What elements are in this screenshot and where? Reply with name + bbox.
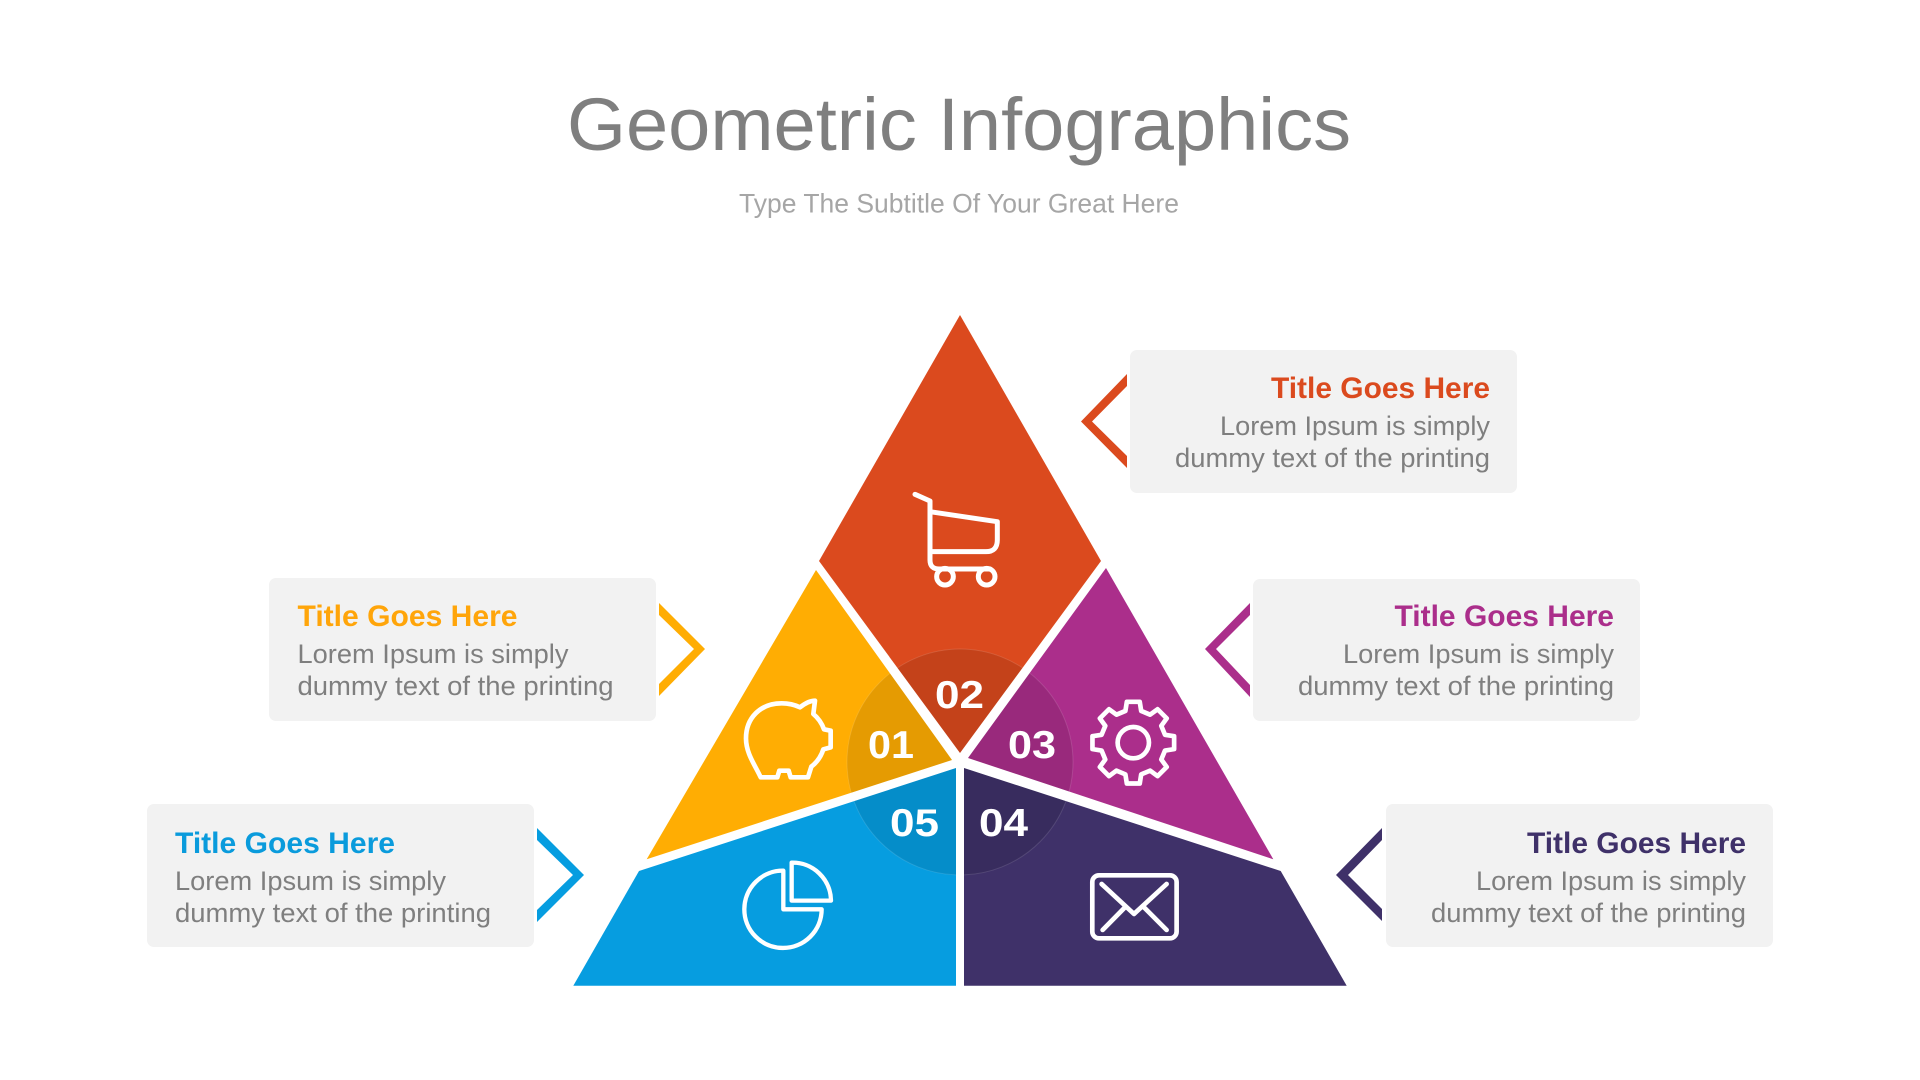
callout body 04 (1431, 866, 1746, 928)
chevron 01 (659, 603, 705, 696)
callout: 04 dark purple (1336, 804, 1773, 947)
icon: shopping cart (915, 494, 997, 585)
callout body 05 (175, 866, 491, 928)
icon: pie chart (744, 863, 831, 948)
callout panel 04 (1386, 804, 1773, 947)
callout body 04: Lorem Ipsum is simply (1476, 866, 1746, 896)
chevron 02 (1081, 374, 1127, 468)
callout: 01 yellow (269, 578, 705, 721)
callout body 01 (298, 639, 614, 701)
callout body 04: dummy text of the printing (1431, 898, 1746, 928)
callout body 02 (1175, 411, 1490, 473)
callout body 02: Lorem Ipsum is simply (1220, 411, 1490, 441)
callout body 05: Lorem Ipsum is simply (175, 866, 446, 896)
callout body 01: dummy text of the printing (298, 671, 614, 701)
segment 02: orange (819, 315, 1101, 753)
chevron 05 (537, 828, 584, 922)
segment 01: yellow (646, 570, 952, 860)
callout: 02 orange (1081, 350, 1517, 493)
number 02: 02 (935, 674, 984, 717)
segment 04: dark purple (964, 768, 1347, 986)
number 05: 05 (890, 802, 939, 845)
segment 05: blue (573, 768, 956, 986)
infographic canvas (147, 96, 1773, 986)
icon: gear (1092, 702, 1174, 783)
callout body 05: dummy text of the printing (175, 898, 491, 928)
number 04: 04 (979, 802, 1028, 845)
callout panel 03 (1253, 579, 1640, 721)
callout: 03 magenta (1205, 579, 1640, 721)
callout heading 02: Title Goes Here (1271, 372, 1490, 405)
callout body 03: dummy text of the printing (1298, 671, 1614, 701)
callout body 01: Lorem Ipsum is simply (298, 639, 569, 669)
title: Geometric Infographics (567, 83, 1351, 166)
callout panel 05 (147, 804, 534, 947)
number 01: 01 (868, 724, 914, 767)
icon: envelope (1092, 875, 1177, 938)
callout panel 01 (269, 578, 656, 721)
callout heading 05: Title Goes Here (175, 827, 395, 860)
subtitle: Type The Subtitle Of Your Great Here (739, 188, 1179, 218)
callout body 03: Lorem Ipsum is simply (1343, 639, 1614, 669)
callout panel 02 (1130, 350, 1517, 493)
icon: piggy bank (746, 701, 831, 777)
callout heading 04: Title Goes Here (1527, 827, 1746, 860)
chevron 03 (1205, 603, 1250, 697)
callout heading 01: Title Goes Here (298, 600, 518, 633)
callout body 02: dummy text of the printing (1175, 443, 1490, 473)
callout: 05 blue (147, 804, 584, 947)
callout heading 03: Title Goes Here (1394, 600, 1614, 633)
chevron 04 (1336, 828, 1382, 921)
number 03: 03 (1008, 724, 1056, 767)
callout body 03 (1298, 639, 1614, 701)
segment 03: magenta (968, 568, 1274, 860)
